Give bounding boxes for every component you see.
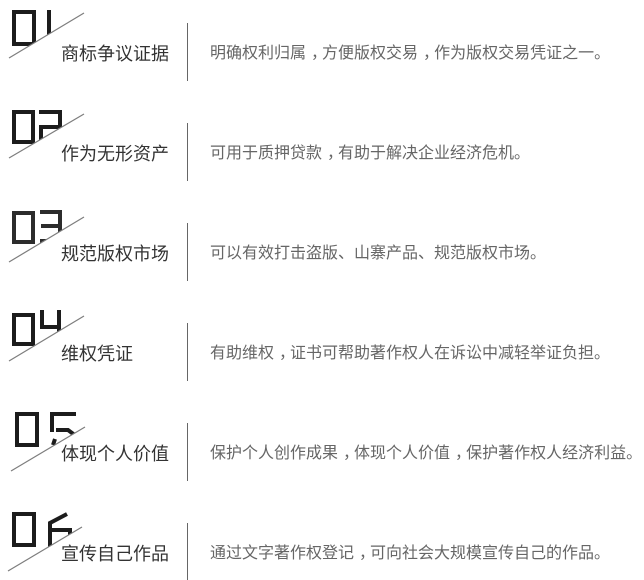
heading 02: 作为无形资产 — [61, 144, 169, 164]
description 02: 可用于质押贷款 ，有助于解决企业经济危机。 — [210, 145, 530, 162]
description 03: 可以有效打击盗版、山寨产品、规范版权市场。 — [210, 245, 546, 262]
number graphic 03 — [8, 210, 84, 262]
divider 06 — [187, 523, 188, 580]
heading 03: 规范版权市场 — [61, 244, 169, 264]
heading 06: 宣传自己作品 — [61, 544, 169, 564]
row 05 — [10, 412, 642, 481]
divider 05 — [187, 423, 188, 481]
divider 01 — [187, 23, 188, 81]
row 03 — [8, 210, 546, 281]
number graphic 05 — [10, 412, 86, 472]
heading 01: 商标争议证据 — [61, 44, 169, 64]
number graphic 01 — [8, 10, 84, 58]
row 01 — [8, 10, 610, 81]
divider 02 — [187, 123, 188, 181]
divider 03 — [187, 223, 188, 281]
heading 05: 体现个人价值 — [61, 444, 169, 464]
number graphic 02 — [8, 110, 84, 158]
number graphic 04 — [8, 310, 84, 362]
description 05: 保护个人创作成果 ，体现个人价值 ，保护著作权人经济利益。 — [210, 445, 642, 462]
description 01: 明确权利归属 ，方便版权交易 ，作为版权交易凭证之一。 — [210, 45, 610, 62]
row 04 — [8, 310, 610, 381]
description 06: 通过文字著作权登记 ，可向社会大规模宣传自己的作品。 — [210, 545, 610, 562]
heading 04: 维权凭证 — [61, 344, 133, 364]
row 02 — [8, 110, 530, 181]
description 04: 有助维权 ，证书可帮助著作权人在诉讼中减轻举证负担。 — [210, 345, 610, 362]
row 06 — [8, 512, 610, 580]
divider 04 — [187, 323, 188, 381]
number graphic 06 — [8, 512, 82, 572]
